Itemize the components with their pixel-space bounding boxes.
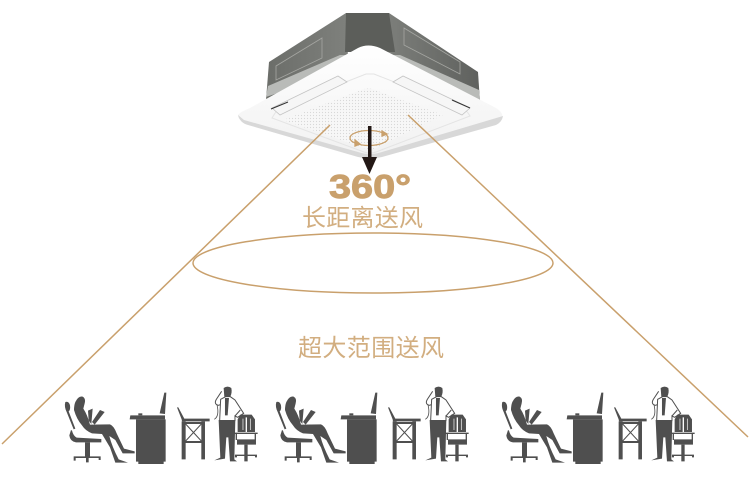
office scene: middle workstation bbox=[276, 387, 469, 464]
rotation icon bbox=[350, 130, 388, 146]
unit body bbox=[266, 13, 480, 102]
right airflow line bbox=[408, 115, 748, 437]
left airflow line bbox=[2, 125, 330, 444]
label: wide-range airflow: 超大范围送风 bbox=[298, 335, 444, 362]
intake grille bbox=[283, 88, 443, 150]
right air vent bbox=[393, 76, 470, 115]
cassette air conditioner unit bbox=[238, 13, 503, 158]
label: long-distance airflow: 长距离送风 bbox=[302, 205, 423, 232]
office scene: right workstation bbox=[502, 387, 695, 464]
down arrow bbox=[362, 126, 377, 174]
office scene: left workstation bbox=[65, 387, 258, 464]
ceiling panel bbox=[238, 46, 502, 156]
left air vent bbox=[272, 76, 347, 115]
heading: 360 degrees: 360° bbox=[329, 168, 411, 205]
coverage ellipse bbox=[193, 233, 553, 293]
